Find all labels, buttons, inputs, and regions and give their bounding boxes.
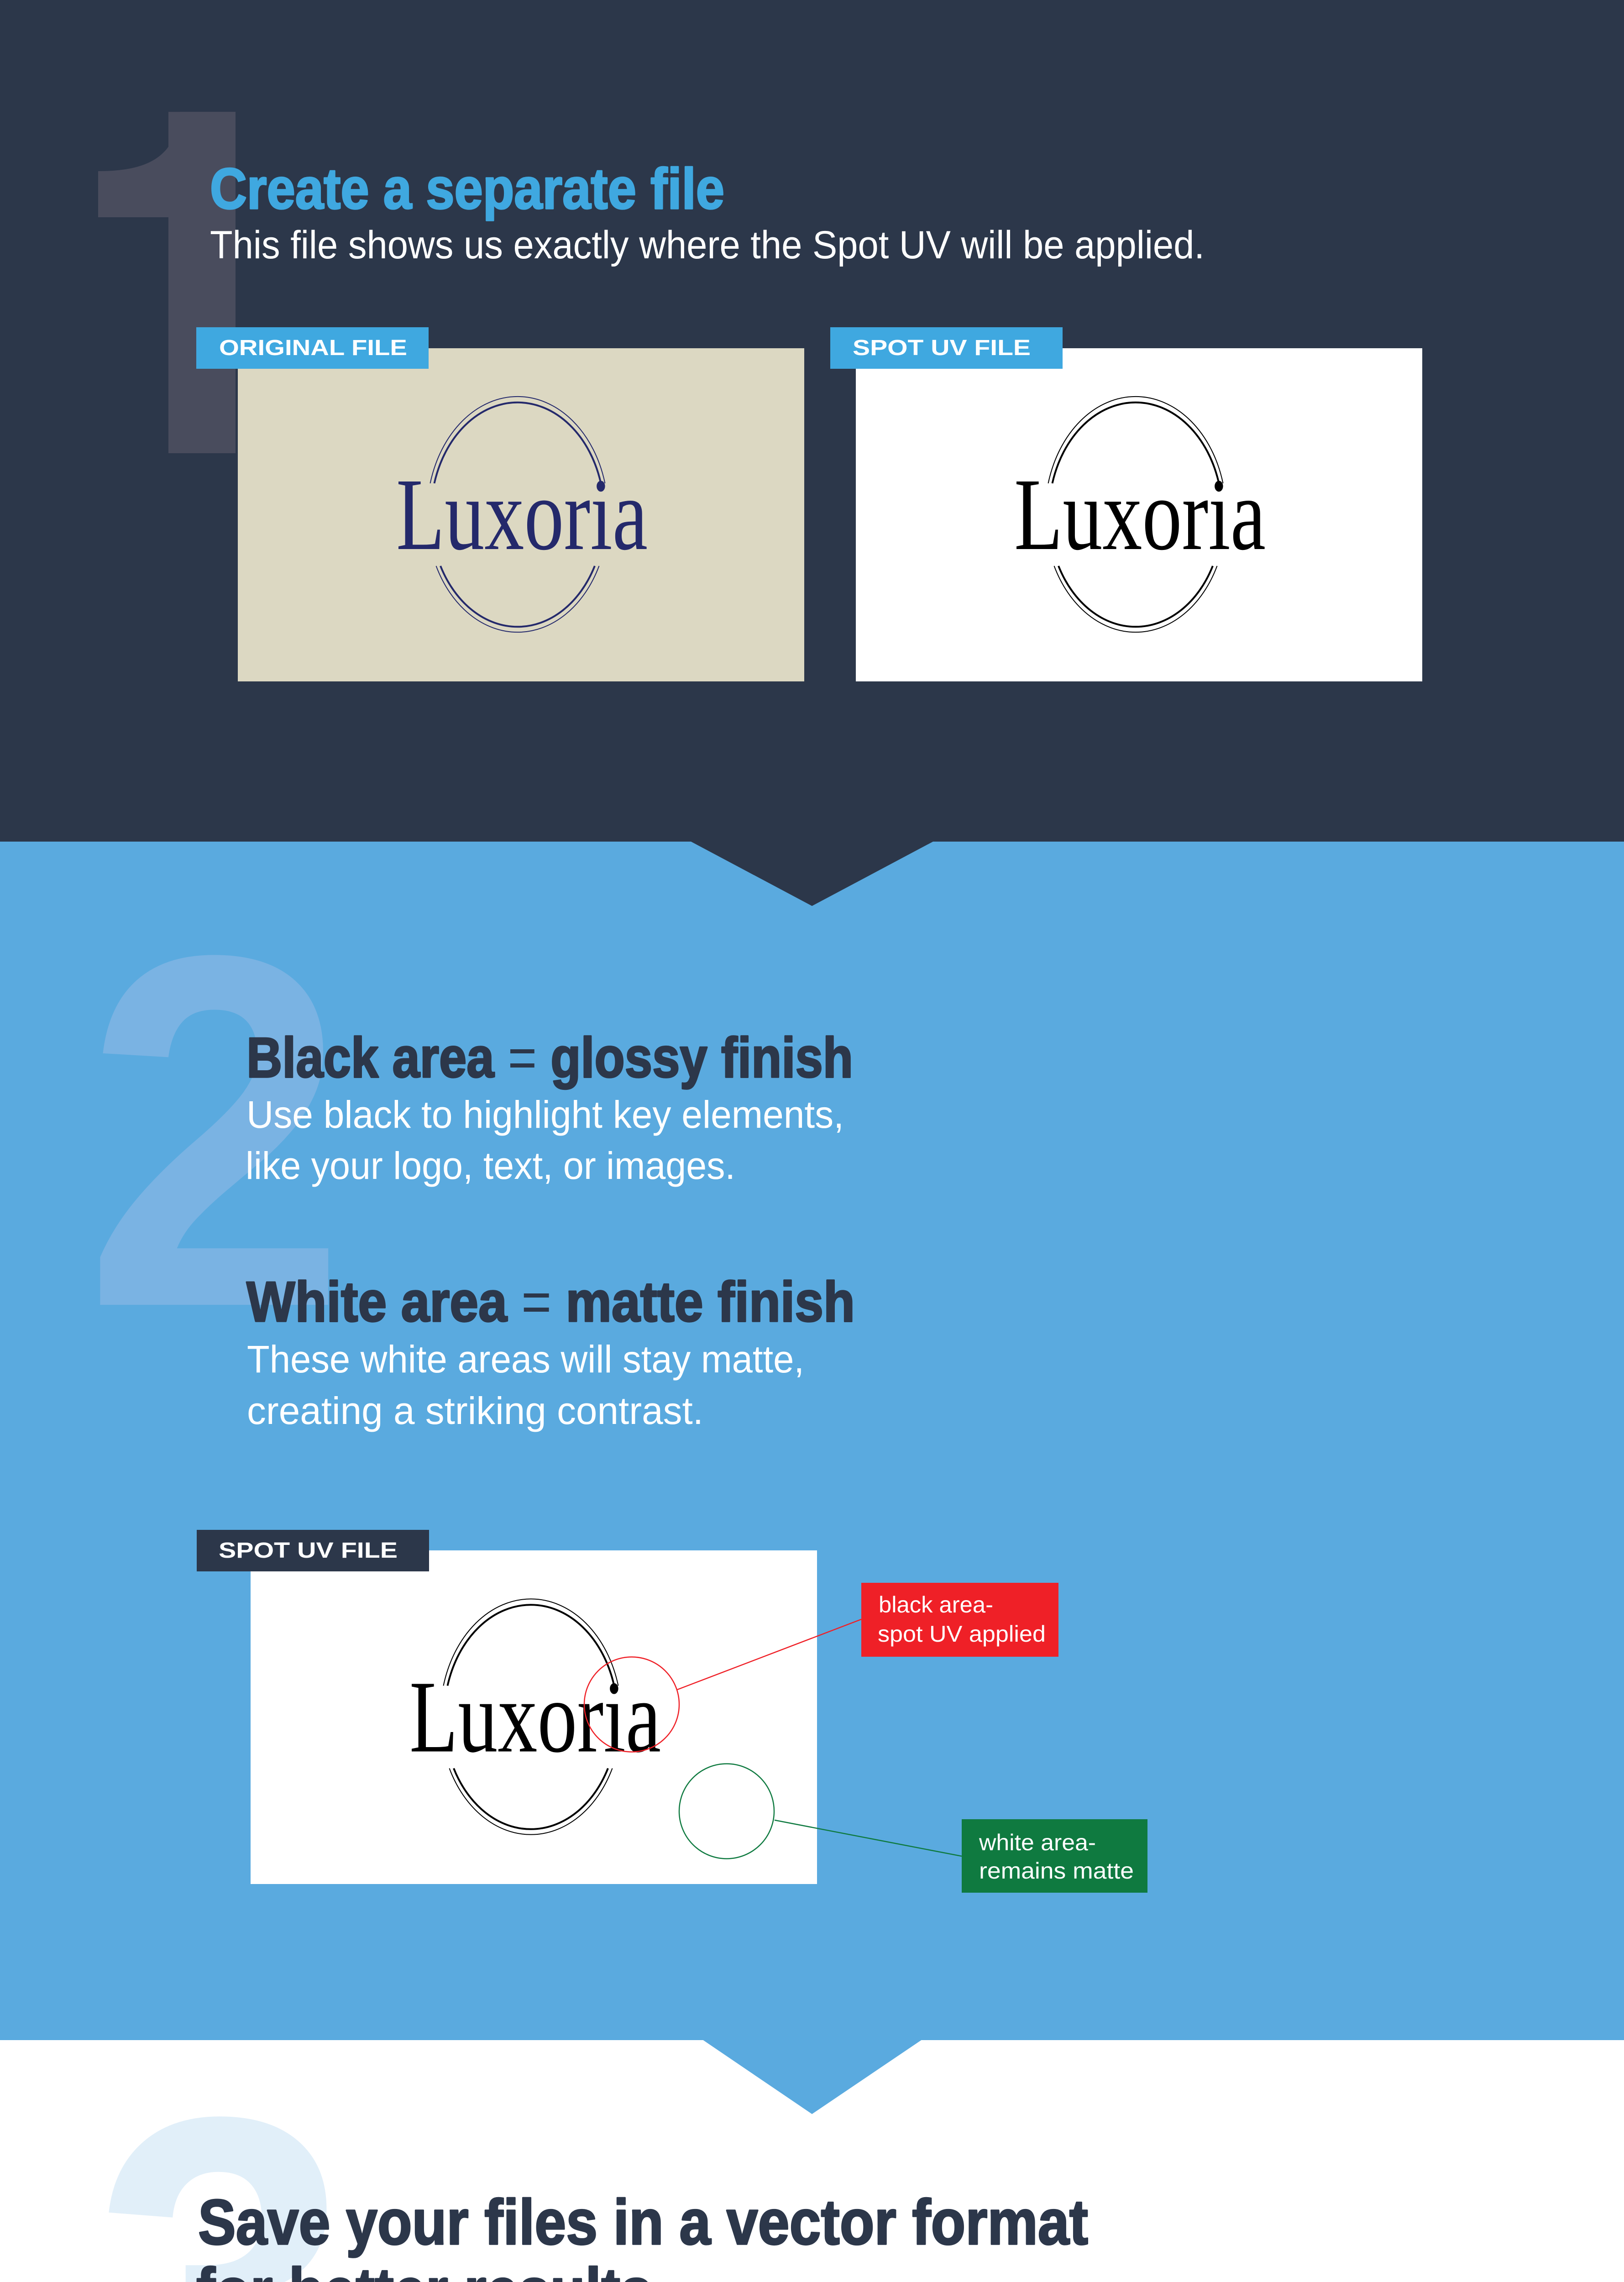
text: white area description: creating a striking contrast. — [247, 1389, 703, 1432]
arrow: navy pointer into step 2 — [690, 841, 934, 906]
logo: luxoria black — [409, 1599, 661, 1835]
text: white area description: These white areas will stay matte, — [247, 1338, 804, 1381]
label: original file: ORIGINAL FILE — [219, 336, 407, 360]
step number 1: 1 — [31, 4, 310, 559]
text: white area description — [247, 1338, 804, 1432]
heading: black area glossy finish: Black area = glossy finish — [246, 1026, 853, 1089]
label: original file — [196, 327, 429, 369]
step number 2: 2 — [84, 852, 347, 1411]
text: step 1 description: This file shows us exactly where the Spot UV will be applied. — [210, 223, 1205, 267]
heading: create a separate file: Create a separate file — [210, 157, 724, 221]
panel: step 2 black and white areas — [0, 841, 1624, 2040]
heading: white area matte finish: White area = matte finish — [246, 1271, 855, 1334]
panel: step 3 save in vector format — [0, 2012, 1624, 2282]
text: black area description: Use black to highlight key elements, — [246, 1093, 844, 1136]
card: original file — [196, 327, 804, 681]
label: spot uv file: SPOT UV FILE — [853, 336, 1031, 360]
logo: luxoria black: Luxoria — [1014, 457, 1266, 571]
card: spot uv file — [830, 327, 1422, 681]
callout: white area remains matte — [679, 1764, 1147, 1893]
arrow: blue pointer into step 3 — [702, 2040, 922, 2114]
card: annotated spot uv file — [197, 1530, 817, 1884]
heading: save your files — [196, 2186, 1088, 2282]
logo: luxoria black: Luxoria — [409, 1659, 661, 1774]
heading: save your files: Save your files in a vector format — [198, 2186, 1088, 2258]
text: black area description — [246, 1093, 844, 1187]
logo: luxoria black — [1014, 397, 1266, 632]
label: spot uv file navy — [197, 1530, 429, 1571]
callout: black area spot uv applied: black area- — [879, 1592, 993, 1617]
callout: black area spot uv applied: spot UV applied — [878, 1621, 1046, 1647]
label: spot uv file navy: SPOT UV FILE — [219, 1539, 398, 1563]
step number 1 — [98, 112, 236, 453]
callout: white area remains matte: remains matte — [979, 1858, 1134, 1884]
label: spot uv file — [830, 327, 1063, 369]
panel: step 1 create a separate file — [0, 0, 1624, 842]
callout: white area remains matte: white area- — [979, 1830, 1096, 1855]
text: black area description: like your logo, text, or images. — [246, 1144, 735, 1187]
callout: black area spot uv applied — [584, 1583, 1058, 1752]
logo: luxoria navy: Luxoria — [396, 457, 648, 571]
logo: luxoria navy — [396, 397, 648, 632]
